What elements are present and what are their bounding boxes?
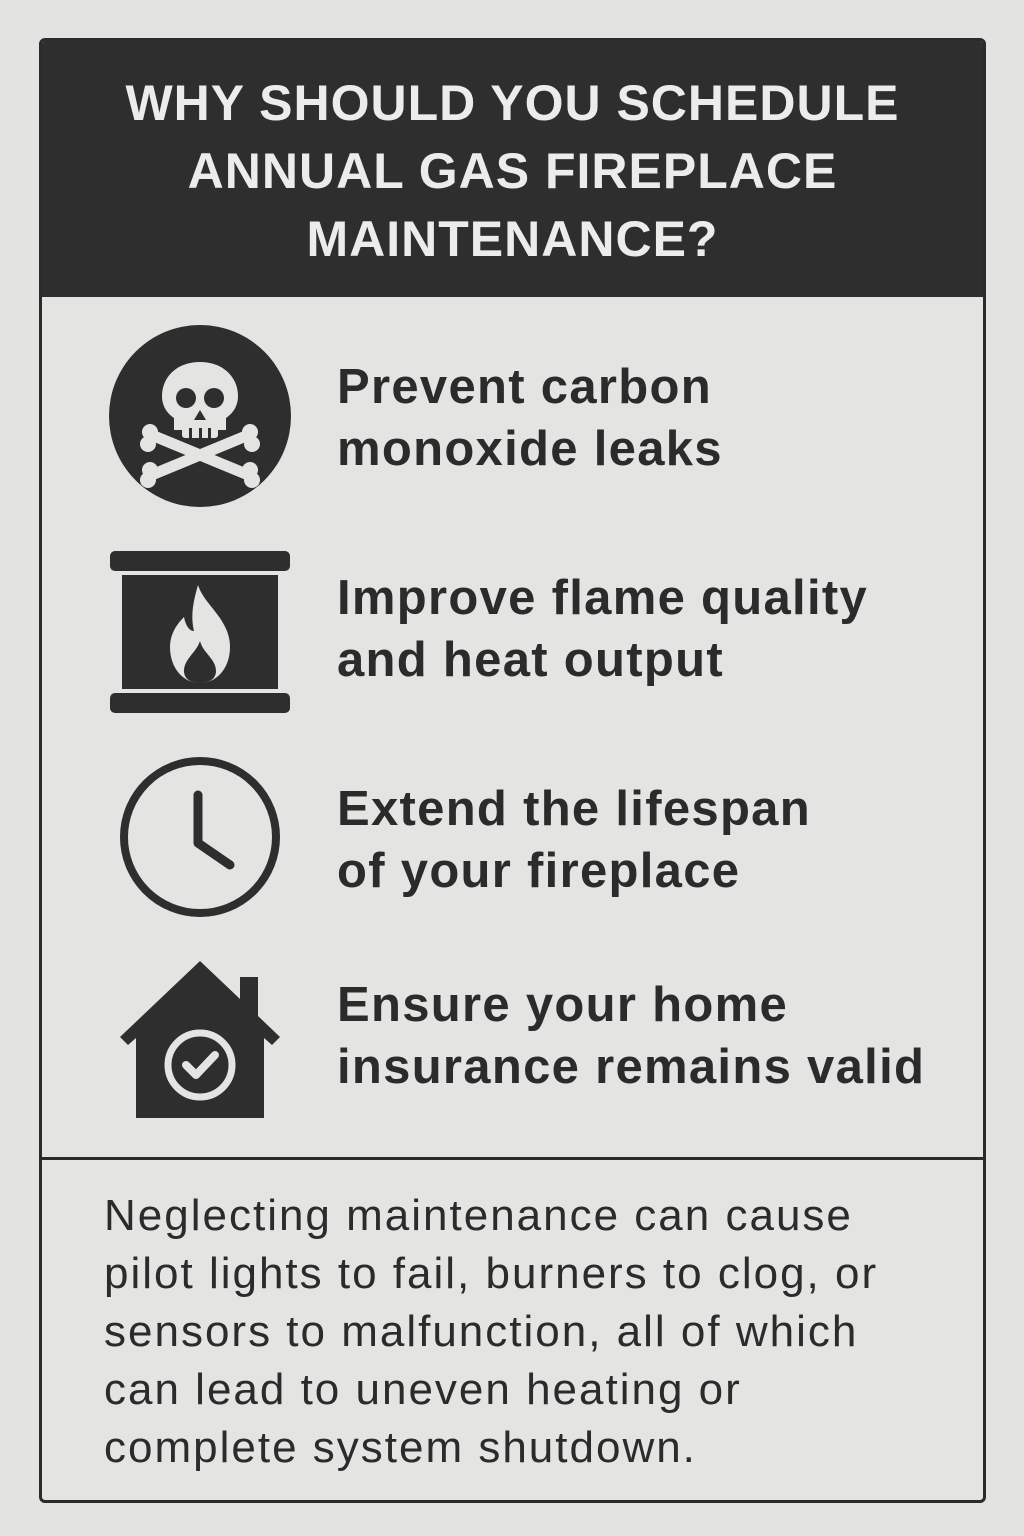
text: extend lifespan: Extend the lifespan bbox=[337, 782, 811, 836]
icon: clock bbox=[120, 757, 280, 917]
title: WHY SHOULD YOU SCHEDULE bbox=[125, 75, 900, 131]
text: insurance valid bbox=[337, 978, 925, 1094]
footer text: Neglecting maintenance can cause bbox=[104, 1191, 853, 1240]
footer text: sensors to malfunction, all of which bbox=[104, 1307, 858, 1356]
title bbox=[42, 41, 983, 297]
title: MAINTENANCE? bbox=[306, 211, 718, 267]
icon: fireplace bbox=[110, 551, 290, 713]
text: prevent carbon monoxide bbox=[337, 360, 723, 476]
item: lifespan bbox=[120, 757, 811, 917]
text: insurance valid: Ensure your home bbox=[337, 978, 788, 1032]
text: improve flame quality: Improve flame quality bbox=[337, 571, 868, 625]
footer text: can lead to uneven heating or bbox=[104, 1365, 742, 1414]
text: improve flame quality: and heat output bbox=[337, 633, 724, 687]
text: improve flame quality bbox=[337, 571, 868, 687]
text: extend lifespan: of your fireplace bbox=[337, 844, 740, 898]
text: insurance valid: insurance remains valid bbox=[337, 1040, 925, 1094]
text: prevent carbon monoxide: Prevent carbon bbox=[337, 360, 712, 414]
text: extend lifespan bbox=[337, 782, 811, 898]
item: flame quality bbox=[110, 551, 868, 713]
footer text bbox=[104, 1191, 878, 1472]
text: prevent carbon monoxide: monoxide leaks bbox=[337, 422, 723, 476]
icon: house check bbox=[120, 961, 280, 1118]
title: ANNUAL GAS FIREPLACE bbox=[188, 143, 837, 199]
icon: skull bbox=[109, 325, 291, 507]
item: insurance bbox=[120, 961, 925, 1118]
footer text: complete system shutdown. bbox=[104, 1423, 697, 1472]
footer text: pilot lights to fail, burners to clog, or bbox=[104, 1249, 878, 1298]
item: carbon monoxide bbox=[109, 325, 723, 507]
